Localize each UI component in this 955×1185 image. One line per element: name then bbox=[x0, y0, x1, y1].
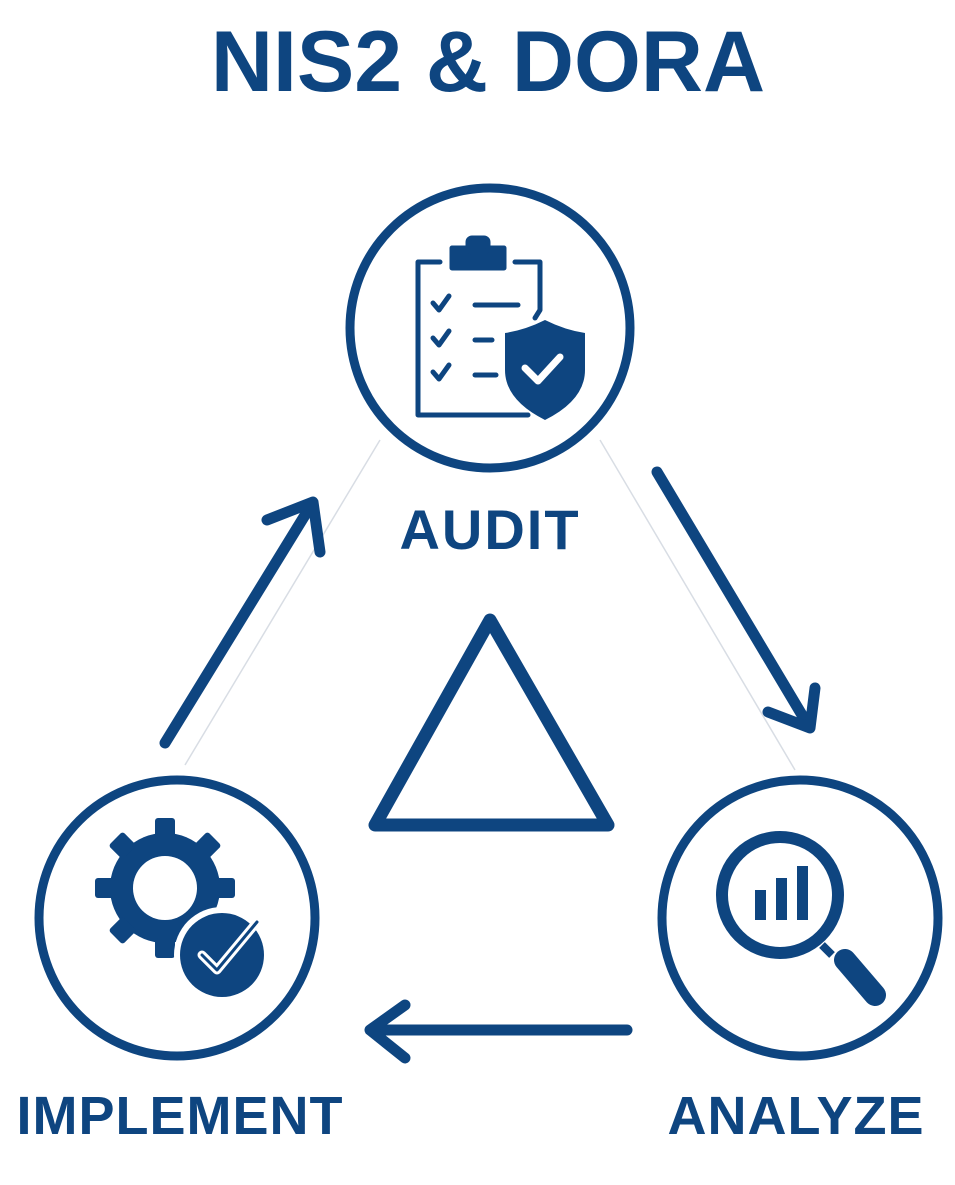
faint connectors bbox=[185, 440, 795, 770]
arrows bbox=[165, 472, 815, 1058]
audit label: AUDIT bbox=[399, 498, 581, 561]
arrow: analyze to implement bbox=[370, 1005, 627, 1058]
implement label: IMPLEMENT bbox=[16, 1086, 344, 1146]
analyze circle with magnifier icon bbox=[662, 780, 938, 1056]
analyze label: ANALYZE bbox=[667, 1086, 925, 1146]
icon: clipboard with shield bbox=[418, 238, 540, 415]
implement circle with gear icon bbox=[39, 780, 315, 1056]
title: NIS2 & DORA bbox=[211, 14, 765, 110]
arrow: audit to analyze bbox=[657, 472, 815, 728]
arrow: implement to audit bbox=[165, 502, 320, 743]
audit circle with icon bbox=[350, 188, 630, 468]
central triangle bbox=[375, 620, 608, 825]
